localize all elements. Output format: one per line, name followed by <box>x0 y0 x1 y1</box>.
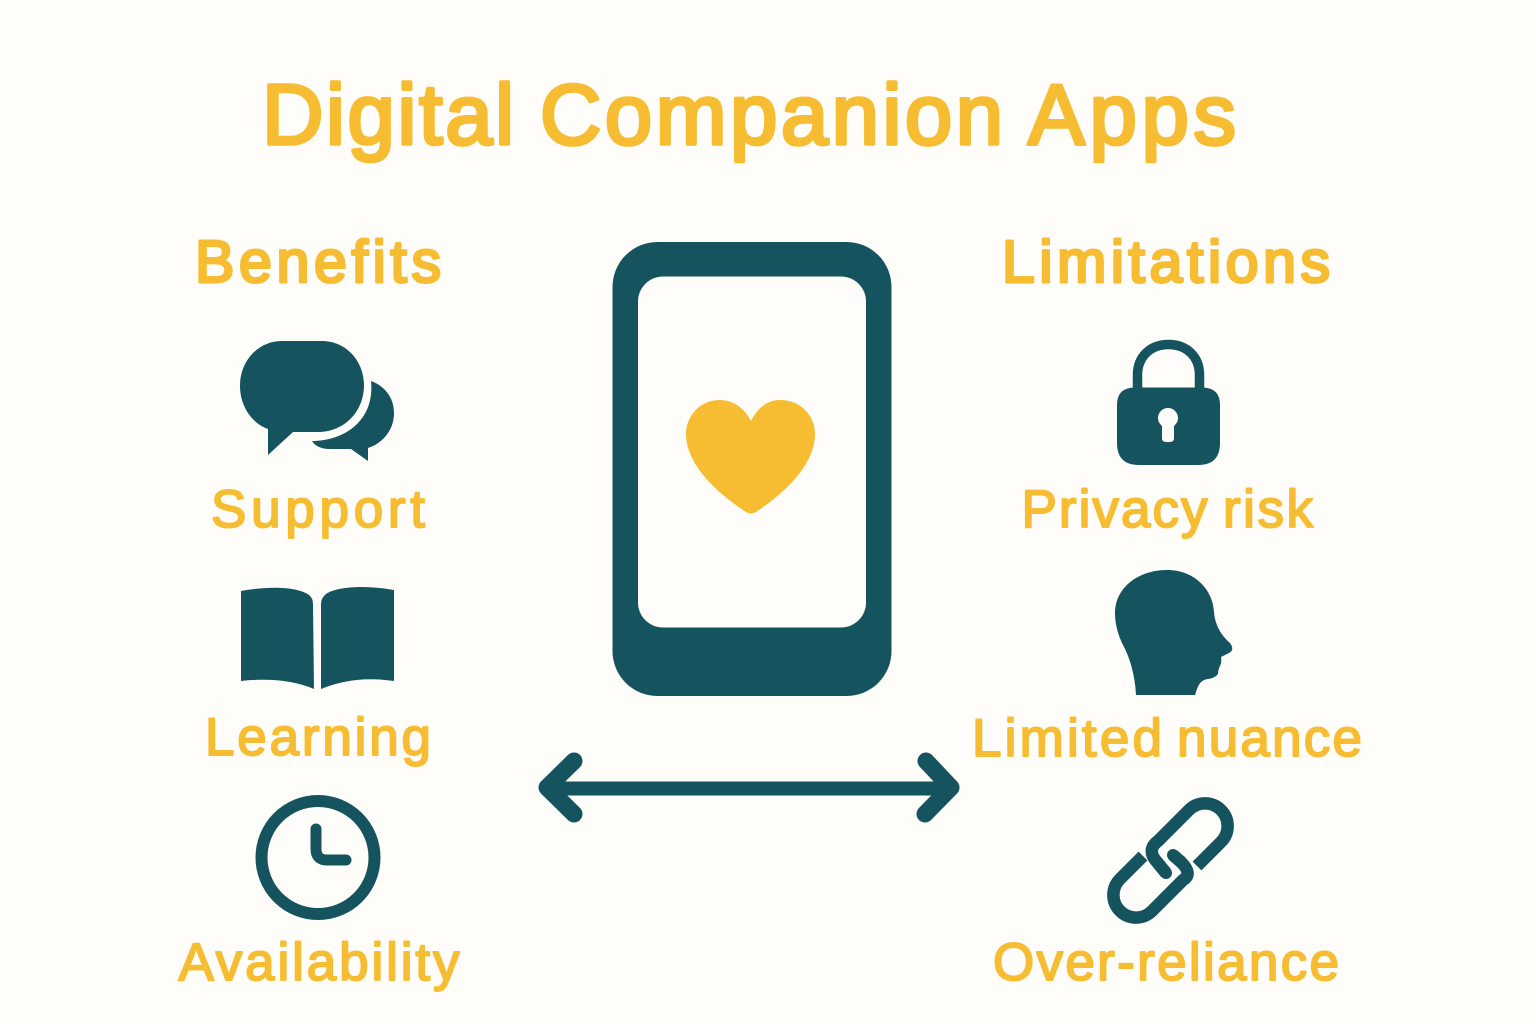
label: privacy risk: Privacy <box>1022 480 1208 539</box>
icon: chain link <box>1113 803 1228 918</box>
label: limited nuance: Limited <box>972 709 1162 768</box>
label: learning: Learning <box>205 708 431 767</box>
icon: speech bubbles <box>240 341 394 461</box>
title: Apps <box>1028 68 1236 163</box>
icon: open book <box>241 587 394 689</box>
icon: head silhouette <box>1115 570 1232 695</box>
icon: phone with heart <box>612 242 892 696</box>
heading: limitations: Limitations <box>1002 229 1330 295</box>
icon: clock <box>262 801 374 914</box>
icon: padlock <box>1117 344 1220 465</box>
heading: benefits: Benefits <box>195 229 441 295</box>
label: limited nuance <box>972 709 1362 768</box>
icon: double arrow <box>547 761 951 814</box>
title: Digital <box>262 68 514 163</box>
label: availability: Availability <box>178 933 460 992</box>
title: Companion <box>540 68 1003 163</box>
label: support: Support <box>211 480 425 539</box>
label: privacy risk <box>1022 480 1314 539</box>
title <box>262 68 1236 163</box>
label: privacy risk: risk <box>1223 480 1314 539</box>
label: limited nuance: nuance <box>1177 709 1362 768</box>
label: over-reliance: Over-reliance <box>993 933 1339 992</box>
